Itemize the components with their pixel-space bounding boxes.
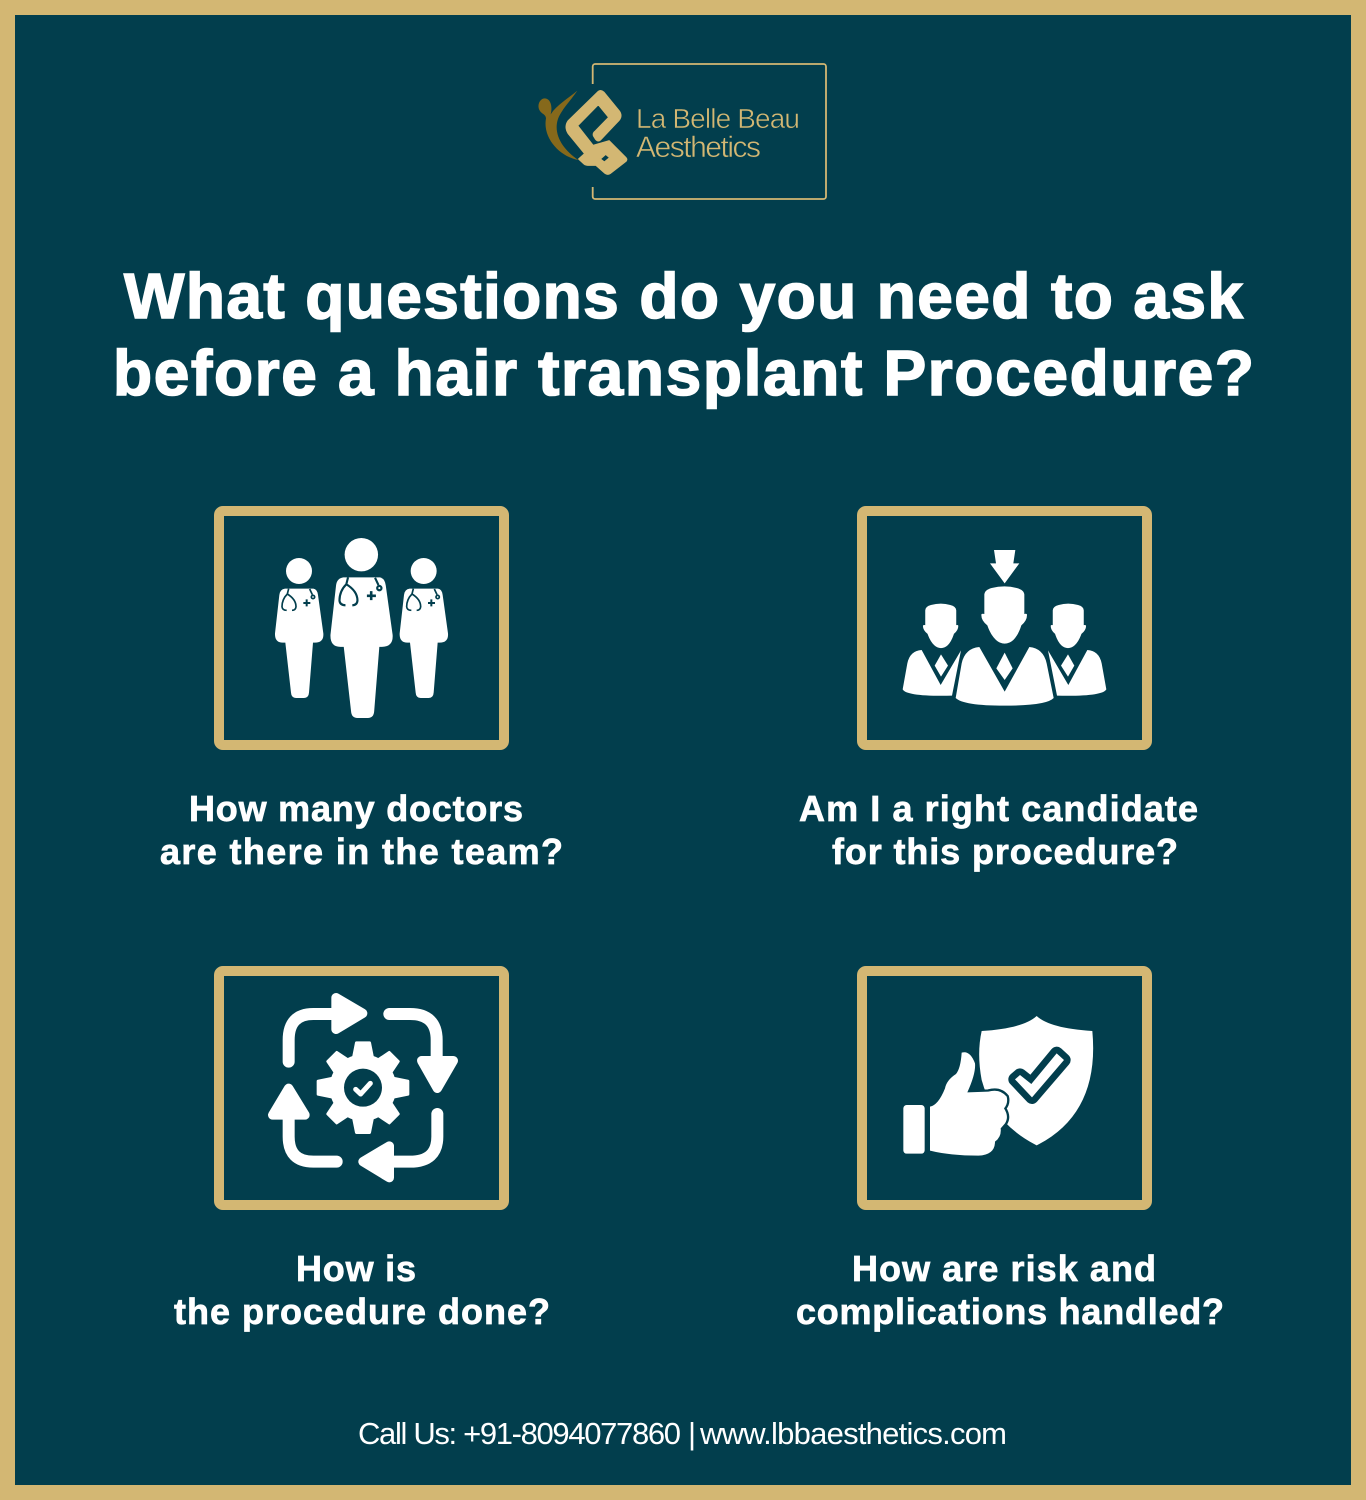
label bbox=[799, 788, 1198, 872]
label: for this procedure? bbox=[832, 831, 1178, 872]
footer contact line: Call Us: +91-8094077860 bbox=[358, 1416, 681, 1451]
label: How are risk and bbox=[852, 1248, 1156, 1289]
title: before a hair transplant Procedure? bbox=[113, 337, 1254, 409]
logo name bbox=[636, 103, 800, 164]
icon: three doctors bbox=[275, 538, 448, 718]
label bbox=[160, 788, 563, 872]
icon: gear with cycle arrows bbox=[273, 998, 453, 1178]
label bbox=[174, 1248, 550, 1332]
label: the procedure done? bbox=[174, 1291, 550, 1332]
label: Am I a right candidate bbox=[799, 788, 1198, 829]
icon: logo mark bbox=[538, 91, 627, 174]
label: are there in the team? bbox=[160, 831, 563, 872]
logo bbox=[538, 64, 826, 199]
logo name: La Belle Beau bbox=[636, 103, 800, 134]
label: How many doctors bbox=[189, 788, 523, 829]
label bbox=[796, 1248, 1224, 1332]
icon frame bbox=[219, 511, 504, 745]
title: What questions do you need to ask bbox=[124, 260, 1243, 332]
label: complications handled? bbox=[796, 1291, 1224, 1332]
panel: risk and complications bbox=[796, 971, 1224, 1332]
panel: doctors in the team bbox=[160, 511, 563, 872]
footer contact line bbox=[358, 1416, 1007, 1451]
footer contact line: www.lbbaesthetics.com bbox=[699, 1416, 1007, 1451]
panel: how the procedure is done bbox=[174, 971, 550, 1332]
icon frame bbox=[862, 971, 1147, 1205]
logo name: Aesthetics bbox=[636, 131, 761, 164]
icon: thumbs up and shield bbox=[903, 1016, 1093, 1156]
footer contact line: | bbox=[688, 1416, 696, 1451]
title bbox=[113, 260, 1254, 409]
icon: selected candidate bbox=[903, 550, 1106, 706]
icon frame bbox=[219, 971, 504, 1205]
label: How is bbox=[296, 1248, 416, 1289]
panel: right candidate bbox=[799, 511, 1198, 872]
icon frame bbox=[862, 511, 1147, 745]
